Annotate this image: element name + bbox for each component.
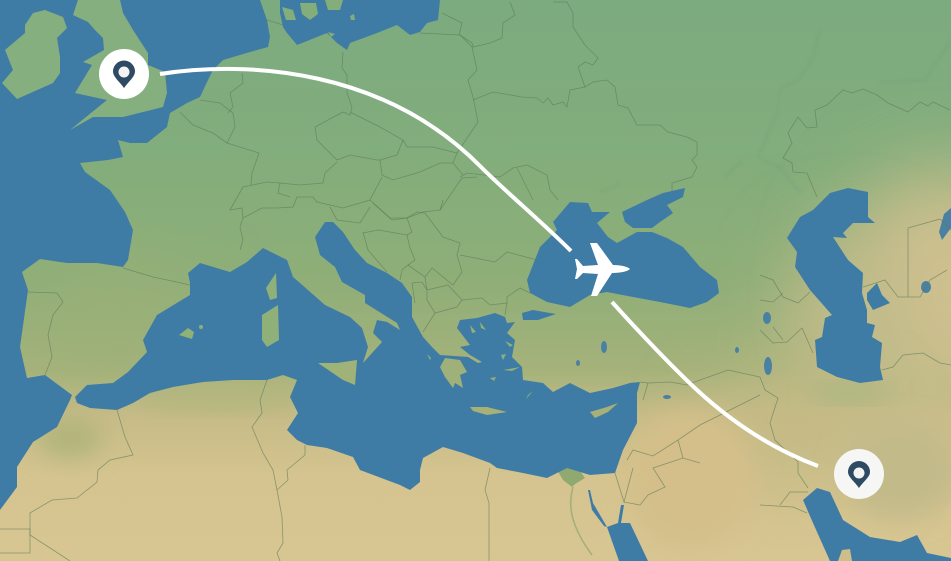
land: Qatar [838, 549, 852, 561]
water: Caspian Sea [787, 188, 883, 383]
water: Atlantic and North Sea [0, 0, 270, 510]
land: Ireland [2, 10, 67, 99]
water: Sea of Marmara [522, 310, 556, 320]
land: Danish islands and Sweden [282, 0, 355, 37]
flight path: plane to destination [612, 302, 818, 466]
icon: airplane [575, 243, 630, 296]
icon: origin location pin [99, 49, 149, 99]
water: Red Sea [607, 523, 648, 561]
flight path: origin to plane [160, 69, 571, 251]
water: Persian Gulf [803, 488, 951, 561]
water: Baltic Sea [280, 0, 440, 50]
land: Peloponnese [440, 358, 467, 388]
land: Mediterranean islands [179, 273, 618, 418]
water: Gulfs of Suez and Aqaba [588, 490, 624, 527]
land: Great Britain [70, 0, 167, 130]
water: Mediterranean Sea [75, 222, 640, 490]
water: Kara-Bogaz [867, 283, 890, 310]
lakes [576, 208, 951, 399]
water: Black Sea [527, 202, 719, 308]
water: Sea of Azov [622, 188, 685, 228]
icon: destination location pin [834, 449, 884, 499]
